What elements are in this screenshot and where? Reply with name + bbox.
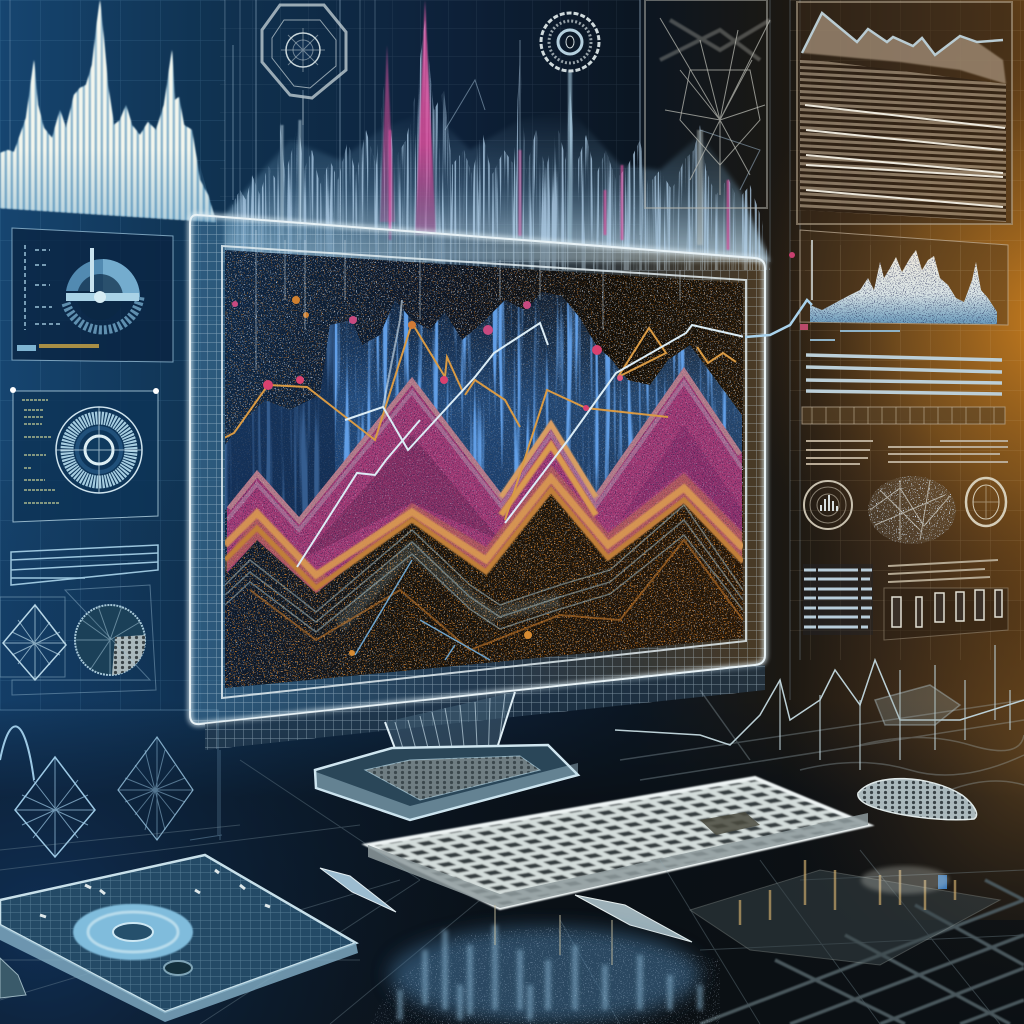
left panel: wire diamond: [0, 597, 66, 680]
top icon: octagon emblem: [262, 5, 346, 125]
right panel: top line chart and text rows: [797, 2, 1012, 224]
left desk curve and wire shapes: [0, 710, 222, 857]
pink mountain band: [225, 360, 745, 600]
bottom centre data city: [370, 905, 720, 1024]
bottom right data city: [690, 860, 1000, 965]
right panel: scatter cloud: [866, 474, 958, 546]
monitor: [190, 215, 765, 750]
icon: right gauge two: [966, 478, 1006, 526]
data point markers: [232, 296, 623, 656]
monitor bezel: [190, 215, 765, 750]
right panel: spectrum chart: [800, 230, 1008, 327]
pen two: [575, 895, 692, 942]
screen chart: [220, 250, 745, 690]
right panel: lower table: [803, 564, 873, 635]
top-left spectrum chart: [0, 0, 216, 222]
left panel: pie gauge: [12, 228, 173, 362]
monitor base: [315, 745, 578, 820]
monitor stand: [385, 692, 515, 775]
tablet: [0, 855, 358, 1022]
orange line series: [220, 323, 736, 520]
right panel: small text blocks: [806, 441, 1008, 464]
small corner device: [0, 958, 26, 998]
right panel: bar rows: [802, 331, 1005, 424]
white line series: [297, 300, 745, 567]
left panel: text rows: [11, 545, 158, 585]
left panel: dotted sphere: [12, 585, 156, 695]
top panel: web diagram: [645, 0, 770, 208]
mouse: [858, 779, 977, 820]
bottom right heavy grid: [700, 880, 1024, 1024]
orange mountain band: [225, 424, 743, 593]
chart line extending out of monitor: [745, 252, 812, 337]
icon: right gauge one: [804, 481, 852, 529]
desk grid: [0, 760, 1024, 1024]
right panel: device row: [884, 560, 1008, 640]
left panel: concentric rings: [10, 387, 159, 522]
top centre spike chart: [215, 0, 775, 275]
blue streak area: [225, 292, 742, 517]
right desk line chart: [615, 645, 1024, 790]
light lines over the monitor top: [256, 230, 680, 370]
lower dark data field: [225, 490, 743, 690]
pen one: [320, 868, 396, 912]
keyboard: [368, 778, 868, 908]
top icon: round target: [541, 13, 599, 71]
